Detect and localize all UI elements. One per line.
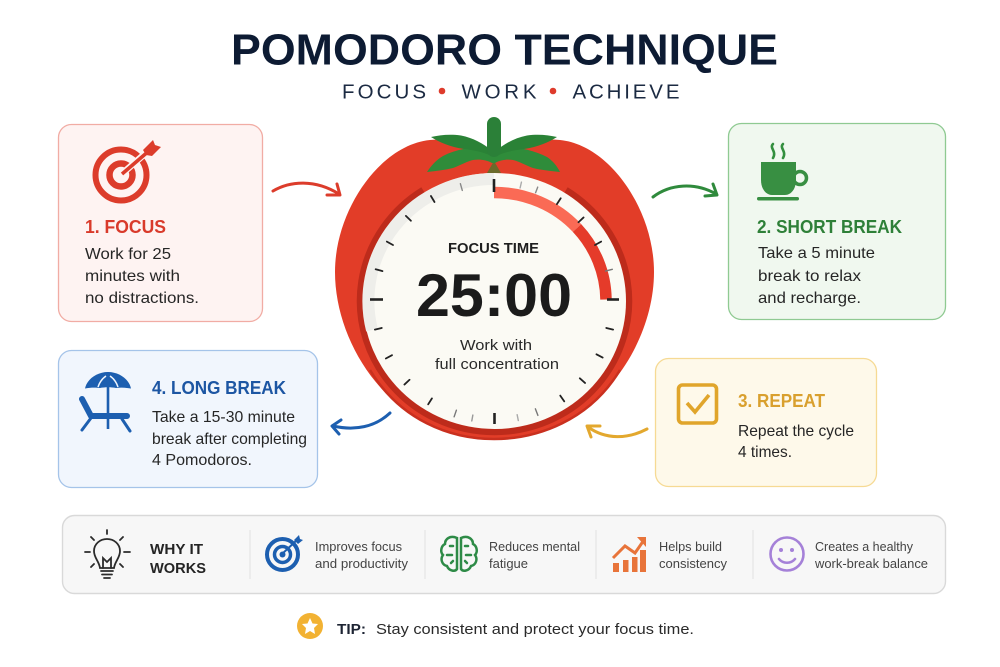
panel: step 1 focus (58, 124, 262, 322)
timer caption: Work with (460, 337, 532, 354)
text: improves focus: Improves focus (315, 539, 402, 554)
text: healthy balance: work-break balance (814, 556, 928, 571)
text: long break description (152, 409, 307, 469)
icon: smiley face (770, 538, 804, 570)
tomato timer (335, 117, 654, 440)
panel: why it works (62, 516, 946, 594)
subtitle (342, 80, 680, 104)
arrow: timer to short break (653, 184, 717, 197)
heading: why it works: WORKS (150, 561, 206, 577)
icon: star badge (297, 613, 323, 639)
title: POMODORO TECHNIQUE (231, 26, 778, 74)
timer label: FOCUS TIME (448, 241, 539, 257)
text: repeat description: Repeat the cycle (738, 423, 854, 440)
text: helps build consistency: consistency (659, 556, 727, 571)
clock tick marks (370, 179, 619, 424)
tip text: TIP: (337, 621, 366, 638)
heading: why it works: WHY IT (150, 542, 203, 558)
clock face (363, 173, 626, 429)
subtitle: ACHIEVE (572, 80, 680, 104)
arrow: focus to timer (273, 183, 340, 195)
text: short break description: break to relax (758, 268, 861, 285)
text: short break description: Take a 5 minute (758, 245, 875, 262)
text: improves focus (315, 539, 408, 571)
text: long break description: Take a 15-30 minute (152, 409, 295, 426)
icon: coffee cup (757, 144, 806, 200)
heading: 2. short break: 2. SHORT BREAK (757, 217, 902, 237)
heading: 4. long break: 4. LONG BREAK (152, 378, 286, 398)
tomato body (335, 139, 654, 440)
text: long break description: 4 Pomodoros. (152, 452, 252, 469)
icon: beach umbrella and lounger (82, 372, 131, 431)
text: repeat description: 4 times. (738, 444, 792, 461)
text: healthy balance (814, 539, 928, 571)
text: short break description: and recharge. (758, 290, 861, 307)
text: short break description (758, 245, 875, 307)
tomato rim (360, 190, 629, 439)
text: helps build consistency (659, 539, 727, 571)
icon: brain (441, 537, 477, 571)
heading: 1. focus: 1. FOCUS (85, 217, 166, 237)
icon: check box (678, 385, 716, 423)
text: long break description: break after completing (152, 431, 307, 448)
subtitle: FOCUS (342, 80, 426, 104)
text: focus description: Work for 25 (85, 246, 171, 263)
text: reduces mental fatigue: fatigue (489, 556, 528, 571)
icon: target with arrow (96, 140, 161, 200)
text: healthy balance: Creates a healthy (815, 539, 913, 554)
icon: blue target (267, 535, 303, 570)
arrow: repeat to timer (587, 426, 647, 437)
panel: step 4 long break (58, 350, 318, 488)
heading: 3. repeat: 3. REPEAT (738, 391, 825, 411)
icon: light bulb (85, 530, 130, 578)
text: reduces mental fatigue: Reduces mental (489, 539, 580, 554)
text: focus description: minutes with (85, 268, 180, 285)
timer caption (435, 337, 559, 373)
text: improves focus: and productivity (315, 556, 408, 571)
text: reduces mental fatigue (489, 539, 580, 571)
text: focus description (85, 246, 199, 307)
timer caption: full concentration (435, 356, 559, 373)
tomato stem and leaves (427, 117, 560, 173)
arrow: timer to long break (332, 413, 390, 434)
subtitle: WORK (462, 80, 537, 104)
heading: why it works (150, 542, 206, 577)
panel: step 2 short break (728, 124, 946, 320)
timer value: 25:00 (416, 262, 572, 329)
icon: growth chart (613, 537, 646, 572)
panel: step 3 repeat (656, 358, 876, 486)
text: focus description: no distractions. (85, 290, 199, 307)
text: repeat description (738, 423, 854, 461)
tip text: Stay consistent and protect your focus time. (376, 621, 694, 638)
progress arc (494, 192, 606, 300)
text: helps build consistency: Helps build (659, 539, 722, 554)
